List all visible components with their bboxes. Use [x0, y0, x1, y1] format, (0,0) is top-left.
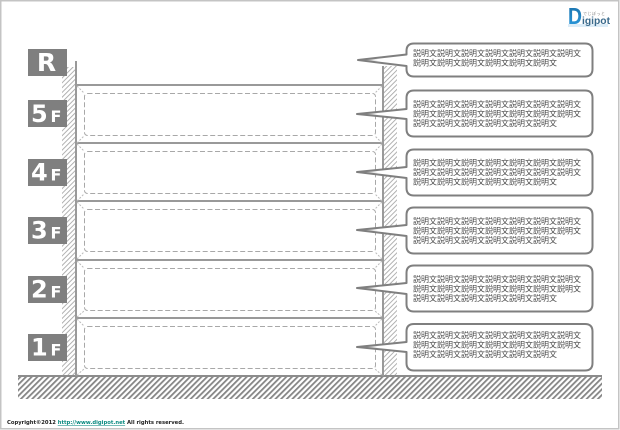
label 4F — [28, 158, 67, 186]
label 2F: 2 — [31, 276, 48, 304]
callout 4F — [357, 150, 592, 196]
label 3F: F — [50, 224, 61, 242]
callout 5F — [357, 90, 592, 136]
callout 4F: 説明文説明文説明文説明文説明文説明文 — [413, 176, 557, 186]
label 5F: F — [50, 107, 61, 126]
label R: R — [37, 48, 56, 77]
label 1F: F — [50, 340, 61, 360]
label 2F — [28, 276, 67, 304]
label 3F: 3 — [31, 216, 48, 244]
ground with hatching — [18, 375, 602, 399]
label 2F: F — [50, 282, 61, 302]
callout 1F: 説明文説明文説明文説明文説明文説明文説明文 — [413, 340, 581, 350]
label 1F — [28, 334, 67, 362]
floor 3F room — [77, 202, 382, 259]
floor 2F room — [77, 261, 382, 317]
callout 5F: 説明文説明文説明文説明文説明文説明文説明文 — [413, 108, 581, 118]
callout 1F: 説明文説明文説明文説明文説明文説明文 — [413, 349, 557, 359]
label R — [28, 48, 67, 77]
callout R: 説明文説明文説明文説明文説明文説明文 — [413, 58, 557, 68]
callout 4F: 説明文説明文説明文説明文説明文説明文説明文 — [413, 158, 581, 168]
left wall hatching — [62, 67, 76, 375]
callout 2F: 説明文説明文説明文説明文説明文説明文説明文 — [413, 284, 581, 294]
callout 3F — [357, 208, 592, 254]
right wall hatching — [384, 66, 397, 375]
callout 1F: 説明文説明文説明文説明文説明文説明文説明文 — [413, 330, 581, 340]
callout 3F: 説明文説明文説明文説明文説明文説明文 — [413, 235, 557, 245]
callout 3F: 説明文説明文説明文説明文説明文説明文説明文 — [413, 216, 581, 226]
callout 2F: 説明文説明文説明文説明文説明文説明文 — [413, 293, 557, 303]
callout R: 説明文説明文説明文説明文説明文説明文説明文 — [413, 48, 581, 58]
copyright footer: Copyright©2012 http://www.digipot.net All rights reserved. — [7, 420, 184, 426]
floor 1F room — [77, 319, 382, 375]
floor 4F room — [77, 144, 382, 201]
callout 1F — [357, 324, 592, 370]
label 4F: 4 — [31, 158, 48, 186]
label 1F: 1 — [31, 334, 48, 362]
label 4F: F — [50, 166, 61, 184]
callout 4F: 説明文説明文説明文説明文説明文説明文説明文 — [413, 167, 581, 177]
logo: Digipot: igipot — [582, 16, 611, 27]
building structure — [75, 61, 384, 376]
callout 2F: 説明文説明文説明文説明文説明文説明文説明文 — [413, 274, 581, 284]
callout 3F: 説明文説明文説明文説明文説明文説明文説明文 — [413, 226, 581, 236]
logo: Digipot — [568, 3, 611, 29]
logo: Digipot: でじぽっと — [583, 10, 605, 16]
callout R — [358, 44, 592, 76]
callout 2F — [357, 266, 592, 312]
floor 5F room — [77, 86, 382, 143]
logo: Digipot: D — [568, 3, 582, 29]
callout 5F: 説明文説明文説明文説明文説明文説明文説明文 — [413, 99, 581, 109]
callout 5F: 説明文説明文説明文説明文説明文説明文 — [413, 118, 557, 128]
label 3F — [28, 216, 67, 244]
label 5F: 5 — [31, 100, 48, 128]
label 5F — [28, 100, 67, 128]
